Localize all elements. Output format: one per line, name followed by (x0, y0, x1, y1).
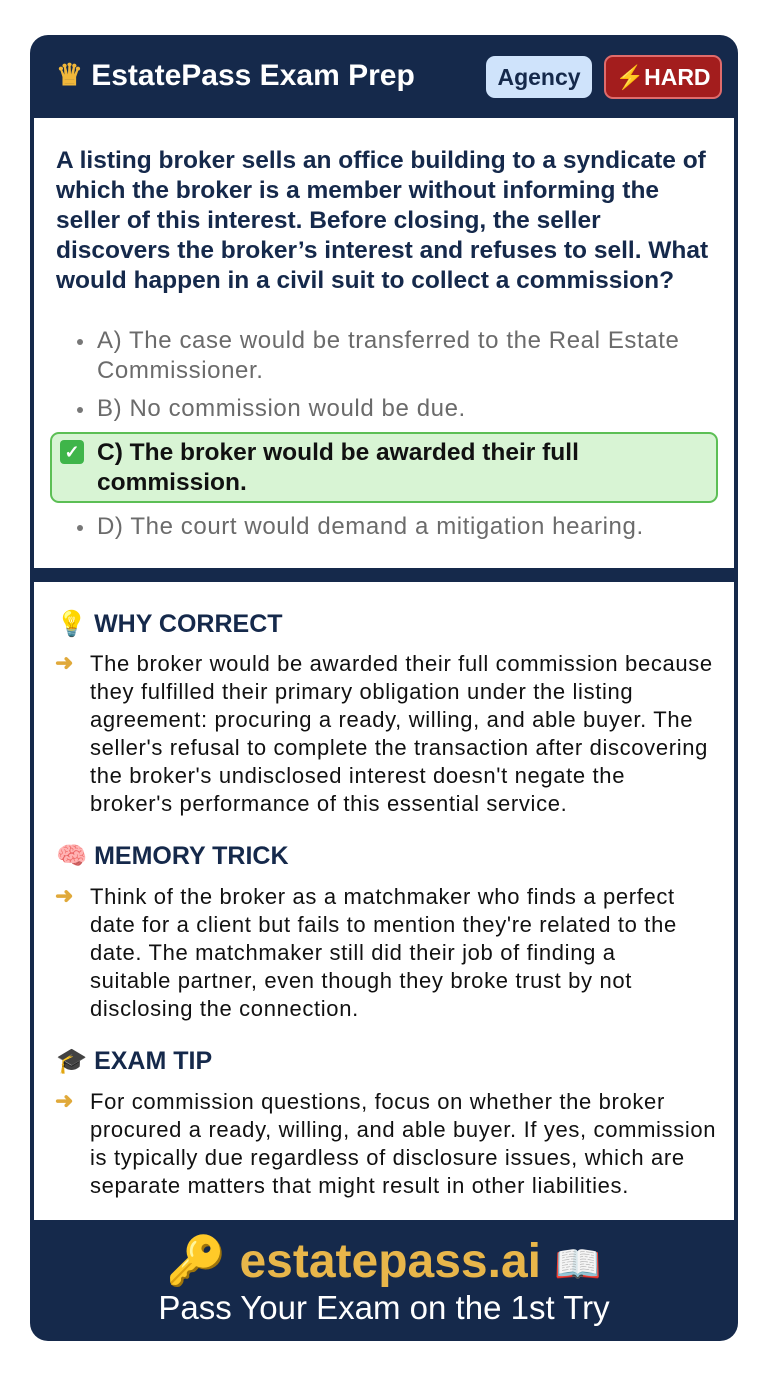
text: why correct: agreement: procuring a ready, willing, and able buyer. The (90, 707, 693, 732)
text: why correct (90, 651, 713, 816)
text: why correct: The broker would be awarded their full commission because (90, 651, 713, 676)
heading: exam tip: 🎓 EXAM TIP (56, 1047, 212, 1075)
badge: Agency: Agency (497, 64, 581, 90)
footer brand: 🔑 estatepass.ai 📖 (166, 1235, 602, 1288)
text: memory trick: Think of the broker as a matchmaker who finds a perfect (90, 884, 675, 909)
heading: why correct: 💡 WHY CORRECT (56, 610, 283, 638)
arrow: ➜ (55, 1088, 73, 1113)
text: exam tip (90, 1089, 716, 1198)
text: memory trick: date. The matchmaker still did their job of finding a (90, 940, 616, 965)
text: memory trick: suitable partner, even though they broke trust by not (90, 968, 632, 993)
text: why correct: they fulfilled their primary obligation under the listing (90, 679, 633, 704)
heading: memory trick: 🧠 MEMORY TRICK (56, 842, 289, 870)
option C correct (50, 432, 718, 503)
option B: B) No commission would be due. (97, 395, 466, 422)
header title: ♛ EstatePass Exam Prep (56, 59, 415, 92)
panel: explanation (34, 582, 734, 1220)
arrow: ➜ (55, 883, 73, 908)
option C correct: ✓ (64, 442, 80, 462)
badge: Agency (486, 56, 592, 98)
option D: D) The court would demand a mitigation hearing. (97, 513, 644, 540)
option C correct: C) The broker would be awarded their full commission. (97, 439, 579, 496)
question text: A listing broker sells an office building to a syndicate of which the broker is a member without informing the seller of this interest. Before closing, the seller discovers the broker’s interest and refuses to sell. What would happen in a civil suit to collect a commission? (56, 147, 708, 294)
text: exam tip: For commission questions, focus on whether the broker (90, 1089, 665, 1114)
text: memory trick: date for a client but fails to mention they're related to the (90, 912, 677, 937)
text: memory trick (90, 884, 677, 1021)
option A: A) The case would be transferred to the Real Estate Commissioner. (97, 327, 679, 384)
text: why correct: broker's performance of this essential service. (90, 791, 567, 816)
text: why correct: seller's refusal to complete the transaction after discovering (90, 735, 708, 760)
text: memory trick: disclosing the connection. (90, 996, 359, 1021)
arrow: ➜ (55, 650, 73, 675)
badge: HARD (604, 55, 722, 99)
text: exam tip: is typically due regardless of disclosure issues, which are (90, 1145, 685, 1170)
text: exam tip: separate matters that might result in other liabilities. (90, 1173, 629, 1198)
panel: question (34, 118, 734, 568)
badge: HARD: ⚡HARD (615, 64, 711, 90)
footer tagline: Pass Your Exam on the 1st Try (158, 1289, 610, 1326)
text: exam tip: procured a ready, willing, and able buyer. If yes, commission (90, 1117, 716, 1142)
text: why correct: the broker's undisclosed interest doesn't negate the (90, 763, 625, 788)
